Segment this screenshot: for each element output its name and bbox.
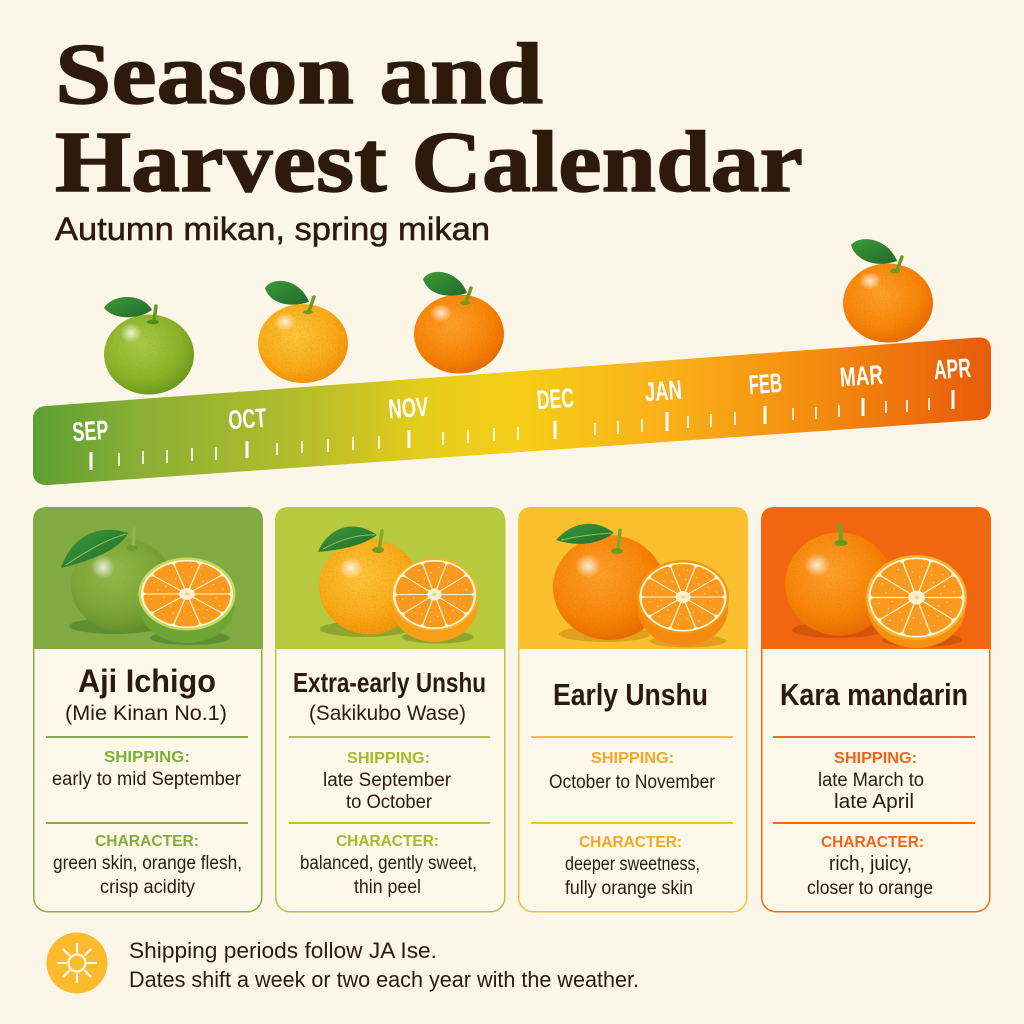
card title: Aji Ichigo bbox=[78, 663, 216, 699]
card image: green mikan with cut half bbox=[33, 507, 263, 649]
character text bbox=[565, 854, 700, 899]
card image: kara mandarin with cut half bbox=[761, 507, 991, 649]
character text: green skin, orange flesh, bbox=[53, 853, 242, 874]
subtitle: Autumn mikan, spring mikan bbox=[55, 211, 490, 247]
card subtitle: (Sakikubo Wase) bbox=[309, 702, 466, 725]
character text: closer to orange bbox=[807, 878, 933, 899]
card title: Early Unshu bbox=[553, 677, 708, 712]
shipping text: late April bbox=[834, 791, 914, 813]
shipping text bbox=[323, 770, 452, 813]
month labels: DEC bbox=[536, 383, 575, 415]
character text: deeper sweetness, bbox=[565, 854, 700, 875]
month labels bbox=[71, 353, 972, 447]
month labels: MAR bbox=[839, 360, 884, 392]
month labels: SEP bbox=[71, 415, 109, 447]
month labels: FEB bbox=[748, 368, 783, 400]
character text: crisp acidity bbox=[100, 877, 195, 898]
character label: CHARACTER: bbox=[95, 833, 199, 850]
shipping text: to October bbox=[346, 792, 433, 813]
title: Season and bbox=[55, 25, 543, 122]
character label: CHARACTER: bbox=[821, 834, 924, 851]
fruit: green mikan on timeline bbox=[104, 297, 194, 394]
card title: Kara mandarin bbox=[780, 677, 968, 712]
fruit: yellow-orange mikan on timeline bbox=[258, 281, 348, 383]
card image: orange mikan with cut half bbox=[518, 507, 748, 649]
shipping label: SHIPPING: bbox=[104, 749, 190, 766]
panel: Kara mandarin bbox=[761, 507, 991, 912]
character text: thin peel bbox=[354, 877, 421, 898]
shipping text: October to November bbox=[549, 772, 716, 793]
shipping label: SHIPPING: bbox=[347, 750, 430, 767]
footer note: Dates shift a week or two each year with the weather. bbox=[129, 967, 639, 992]
character text: rich, juicy, bbox=[829, 853, 912, 875]
character label: CHARACTER: bbox=[336, 833, 439, 850]
icon: sun bbox=[46, 932, 108, 994]
month labels: JAN bbox=[644, 375, 683, 407]
title: Harvest Calendar bbox=[55, 113, 803, 210]
timeline band bbox=[33, 337, 991, 485]
fruit: kara mandarin on timeline bbox=[843, 239, 933, 342]
panel: Aji Ichigo bbox=[33, 507, 263, 912]
card subtitle: (Mie Kinan No.1) bbox=[65, 702, 227, 725]
title bbox=[55, 25, 803, 210]
card image: yellow mikan with cut half bbox=[275, 507, 505, 649]
card title: Extra-early Unshu bbox=[293, 667, 486, 698]
character text bbox=[300, 853, 477, 898]
panel: Early Unshu bbox=[518, 507, 748, 912]
fruit: orange mikan on timeline bbox=[414, 272, 504, 374]
character text: balanced, gently sweet, bbox=[300, 853, 477, 874]
footer note bbox=[129, 938, 639, 992]
panel: Extra-early Unshu bbox=[275, 507, 505, 912]
shipping text: late March to bbox=[818, 770, 924, 791]
footer note: Shipping periods follow JA Ise. bbox=[129, 938, 437, 963]
shipping text bbox=[818, 770, 924, 813]
character text: fully orange skin bbox=[565, 878, 693, 899]
month ticks bbox=[91, 390, 953, 470]
shipping text: early to mid September bbox=[52, 769, 242, 790]
minor ticks bbox=[119, 398, 929, 466]
month labels: OCT bbox=[227, 403, 268, 435]
character text bbox=[53, 853, 242, 898]
shipping label: SHIPPING: bbox=[834, 750, 917, 767]
character text bbox=[807, 853, 933, 899]
character label: CHARACTER: bbox=[579, 834, 682, 851]
month labels: NOV bbox=[387, 392, 429, 424]
month labels: APR bbox=[933, 353, 972, 385]
shipping label: SHIPPING: bbox=[591, 750, 674, 767]
shipping text: late September bbox=[323, 770, 452, 791]
